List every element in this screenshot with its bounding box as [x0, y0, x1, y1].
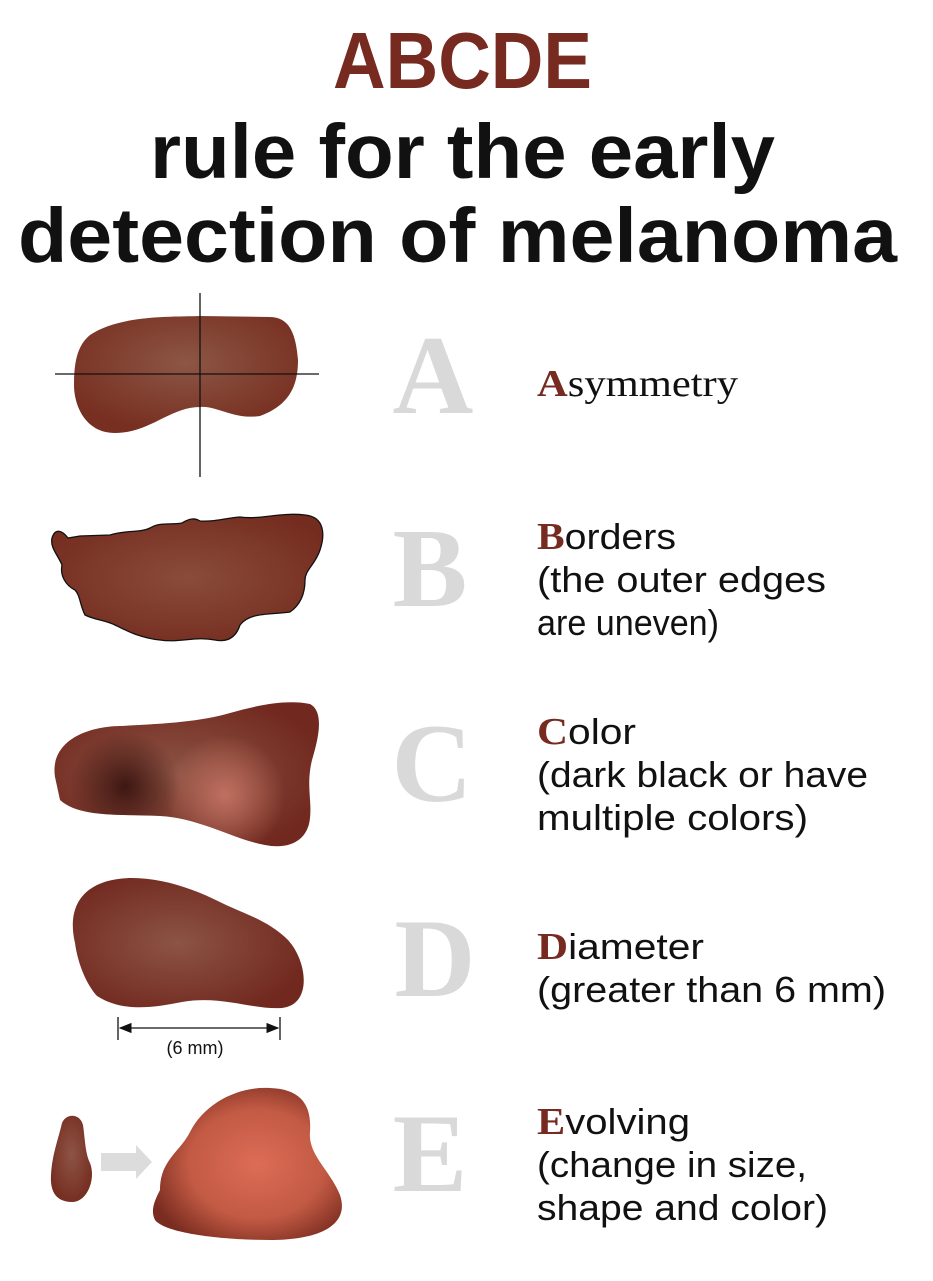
label: evolving: shape and color)	[537, 1187, 828, 1228]
big letters: E	[393, 1092, 467, 1216]
big letters	[392, 314, 475, 1216]
big letters: D	[395, 897, 475, 1021]
label: borders: (the outer edges	[537, 559, 826, 600]
big letters: C	[392, 702, 472, 826]
icon: diameter mole: (6 mm)	[166, 1038, 224, 1058]
label: diameter: Diameter	[537, 926, 704, 968]
icon: diameter mole	[73, 878, 304, 1058]
label: diameter	[537, 926, 886, 1010]
label: color	[537, 711, 868, 838]
label: evolving	[537, 1101, 828, 1228]
title	[18, 16, 898, 279]
label: diameter: (greater than 6 mm)	[537, 969, 886, 1010]
big letters: B	[393, 507, 467, 631]
icon: color mole	[54, 702, 319, 846]
label: color: Color	[537, 711, 636, 753]
label: evolving: Evolving	[537, 1101, 690, 1143]
label: color: multiple colors)	[537, 797, 808, 838]
label: borders: Borders	[537, 516, 676, 558]
big letters: A	[393, 314, 474, 438]
label: evolving: (change in size,	[537, 1144, 807, 1185]
label: borders: are uneven)	[537, 602, 719, 643]
label: color: (dark black or have	[537, 754, 868, 795]
icon: asymmetry mole	[55, 293, 319, 477]
label: asymmetry: Asymmetry	[537, 363, 738, 405]
icon: border mole	[52, 514, 323, 641]
title: detection of melanoma	[18, 193, 898, 279]
title: ABCDE	[333, 16, 592, 105]
icon: evolving moles	[51, 1088, 342, 1240]
label: borders	[537, 516, 826, 643]
title: rule for the early	[150, 109, 775, 195]
